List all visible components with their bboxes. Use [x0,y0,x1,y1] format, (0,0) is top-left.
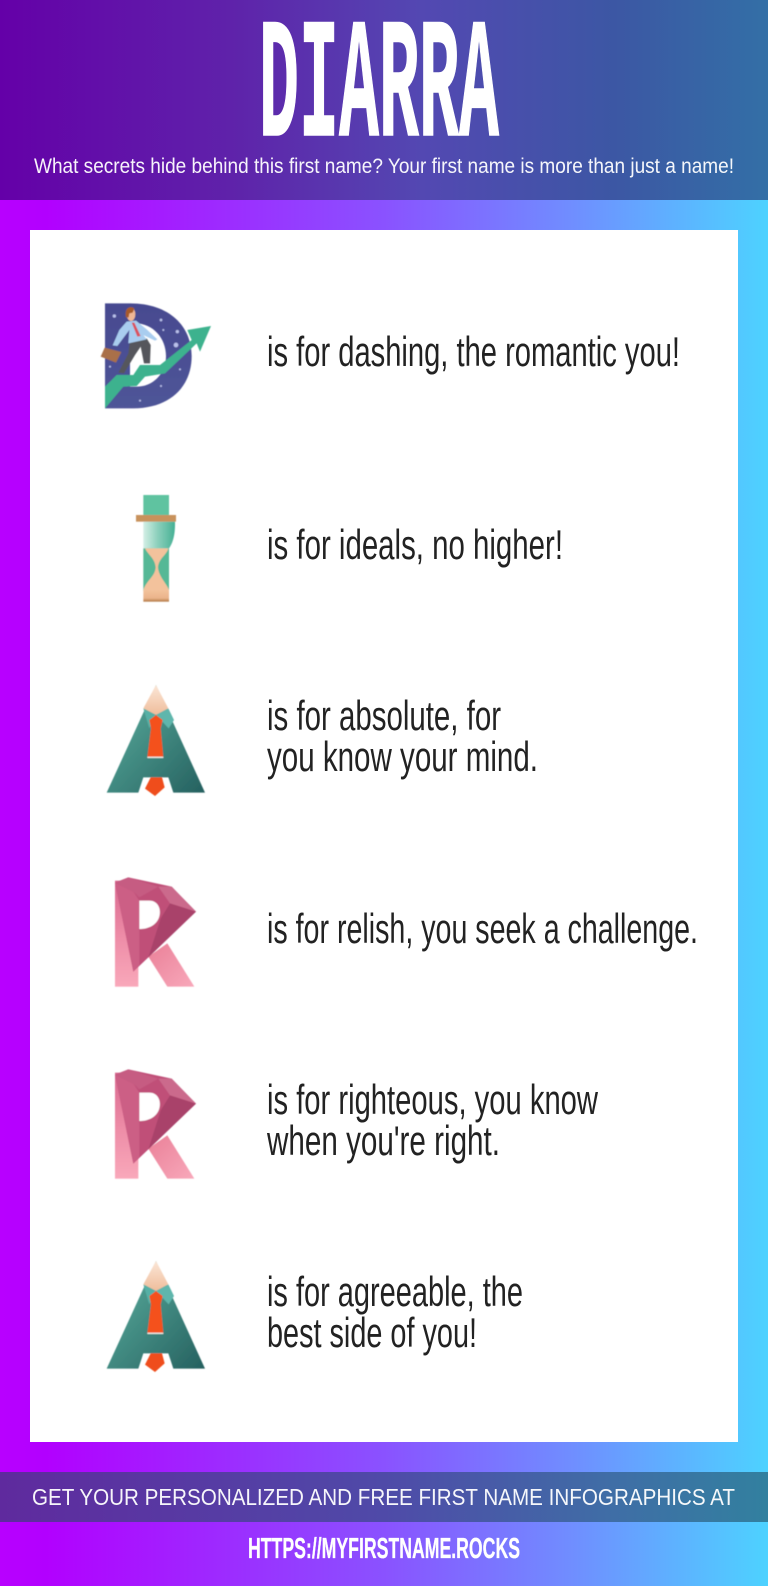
text: A line [267,692,538,780]
text: I line: is for ideals, no higher! [267,521,563,568]
text: A line: is for absolute, for [267,692,501,739]
text: R line second: is for righteous, you know [267,1076,598,1123]
text: A line second: is for agreeable, the [267,1268,523,1315]
text: R line second: when you're right. [266,1117,500,1164]
text: A line second: best side of you! [267,1309,477,1356]
header band [0,0,768,200]
white content panel [30,230,738,1442]
text: A line second [267,1268,523,1356]
footer url: HTTPS://MYFIRSTNAME.ROCKS [248,1533,520,1565]
text: A line: you know your mind. [267,733,538,780]
icon: letter D with businessman on rising arrow [101,303,211,408]
icon: letter A pencil and tie [107,685,205,796]
icon: letter I hourglass [136,495,176,602]
icon: letter R gem [115,877,196,987]
icon: letter A pencil and tie second [107,1261,205,1372]
icon: letter R gem second [115,1069,196,1179]
text: R line second [266,1076,598,1164]
footer band [0,1472,768,1522]
